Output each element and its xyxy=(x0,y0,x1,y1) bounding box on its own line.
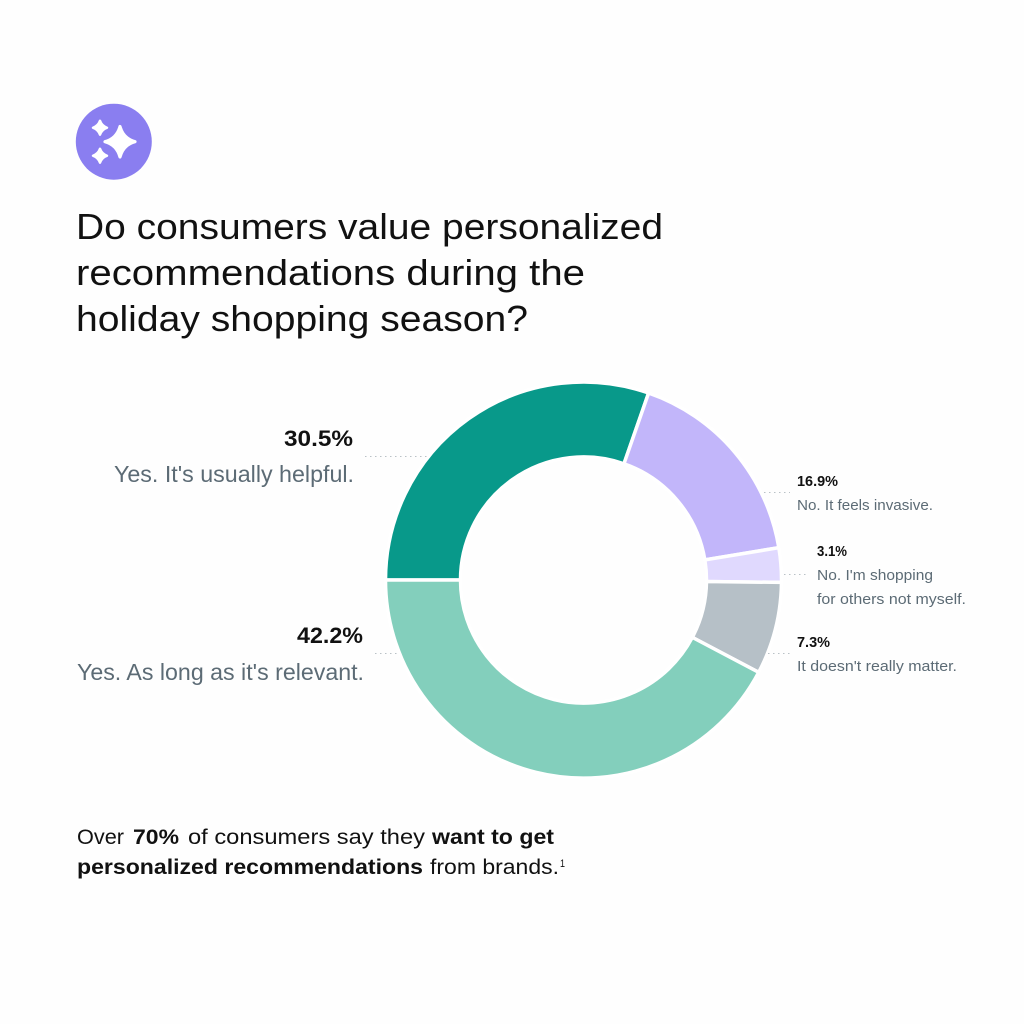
label: 3.1% no shopping for others: No. I'm shopping xyxy=(817,567,933,584)
title xyxy=(76,206,663,339)
label: 3.1% no shopping for others: for others not myself. xyxy=(817,591,966,608)
label: 42.2% yes as long as relevant: 42.2% xyxy=(297,623,363,648)
label: 42.2% yes as long as relevant: Yes. As long as it's relevant. xyxy=(77,659,364,685)
footer text: 70% xyxy=(133,826,179,849)
title: Do consumers value personalized xyxy=(76,206,663,247)
segment: yes usually helpful 30.5% xyxy=(386,382,649,580)
label: 30.5% yes usually helpful xyxy=(114,426,354,487)
footer text: personalized recommendations xyxy=(77,856,423,879)
footer text: Over xyxy=(77,826,124,849)
footer text: from brands. xyxy=(430,856,559,879)
title: holiday shopping season? xyxy=(76,298,528,339)
segment: yes if relevant 42.2% xyxy=(385,580,759,778)
segment: no shopping for others 3.1% xyxy=(705,548,781,582)
label: 16.9% no invasive: 16.9% xyxy=(797,474,838,490)
label: 3.1% no shopping for others xyxy=(817,544,966,608)
label: 3.1% no shopping for others: 3.1% xyxy=(817,544,847,560)
donut chart xyxy=(385,382,781,778)
footer text: want to get xyxy=(431,826,554,849)
footer text: of consumers say they xyxy=(188,826,426,849)
footer text xyxy=(77,826,565,879)
label: 30.5% yes usually helpful: Yes. It's usually helpful. xyxy=(114,461,354,487)
segment: does not matter 7.3% xyxy=(692,582,781,672)
label: 42.2% yes as long as relevant xyxy=(77,623,364,685)
label: 30.5% yes usually helpful: 30.5% xyxy=(284,426,353,451)
label: 7.3% does not matter: It doesn't really matter. xyxy=(797,658,957,675)
label: 16.9% no invasive: No. It feels invasive. xyxy=(797,497,933,514)
label: 7.3% does not matter: 7.3% xyxy=(797,635,830,651)
footer text: 1 xyxy=(560,858,565,870)
title: recommendations during the xyxy=(76,252,585,293)
label: 16.9% no invasive xyxy=(797,474,933,514)
label: 7.3% does not matter xyxy=(797,635,957,675)
icon: sparkles badge xyxy=(76,104,152,180)
segment: no invasive 16.9% xyxy=(624,393,779,560)
